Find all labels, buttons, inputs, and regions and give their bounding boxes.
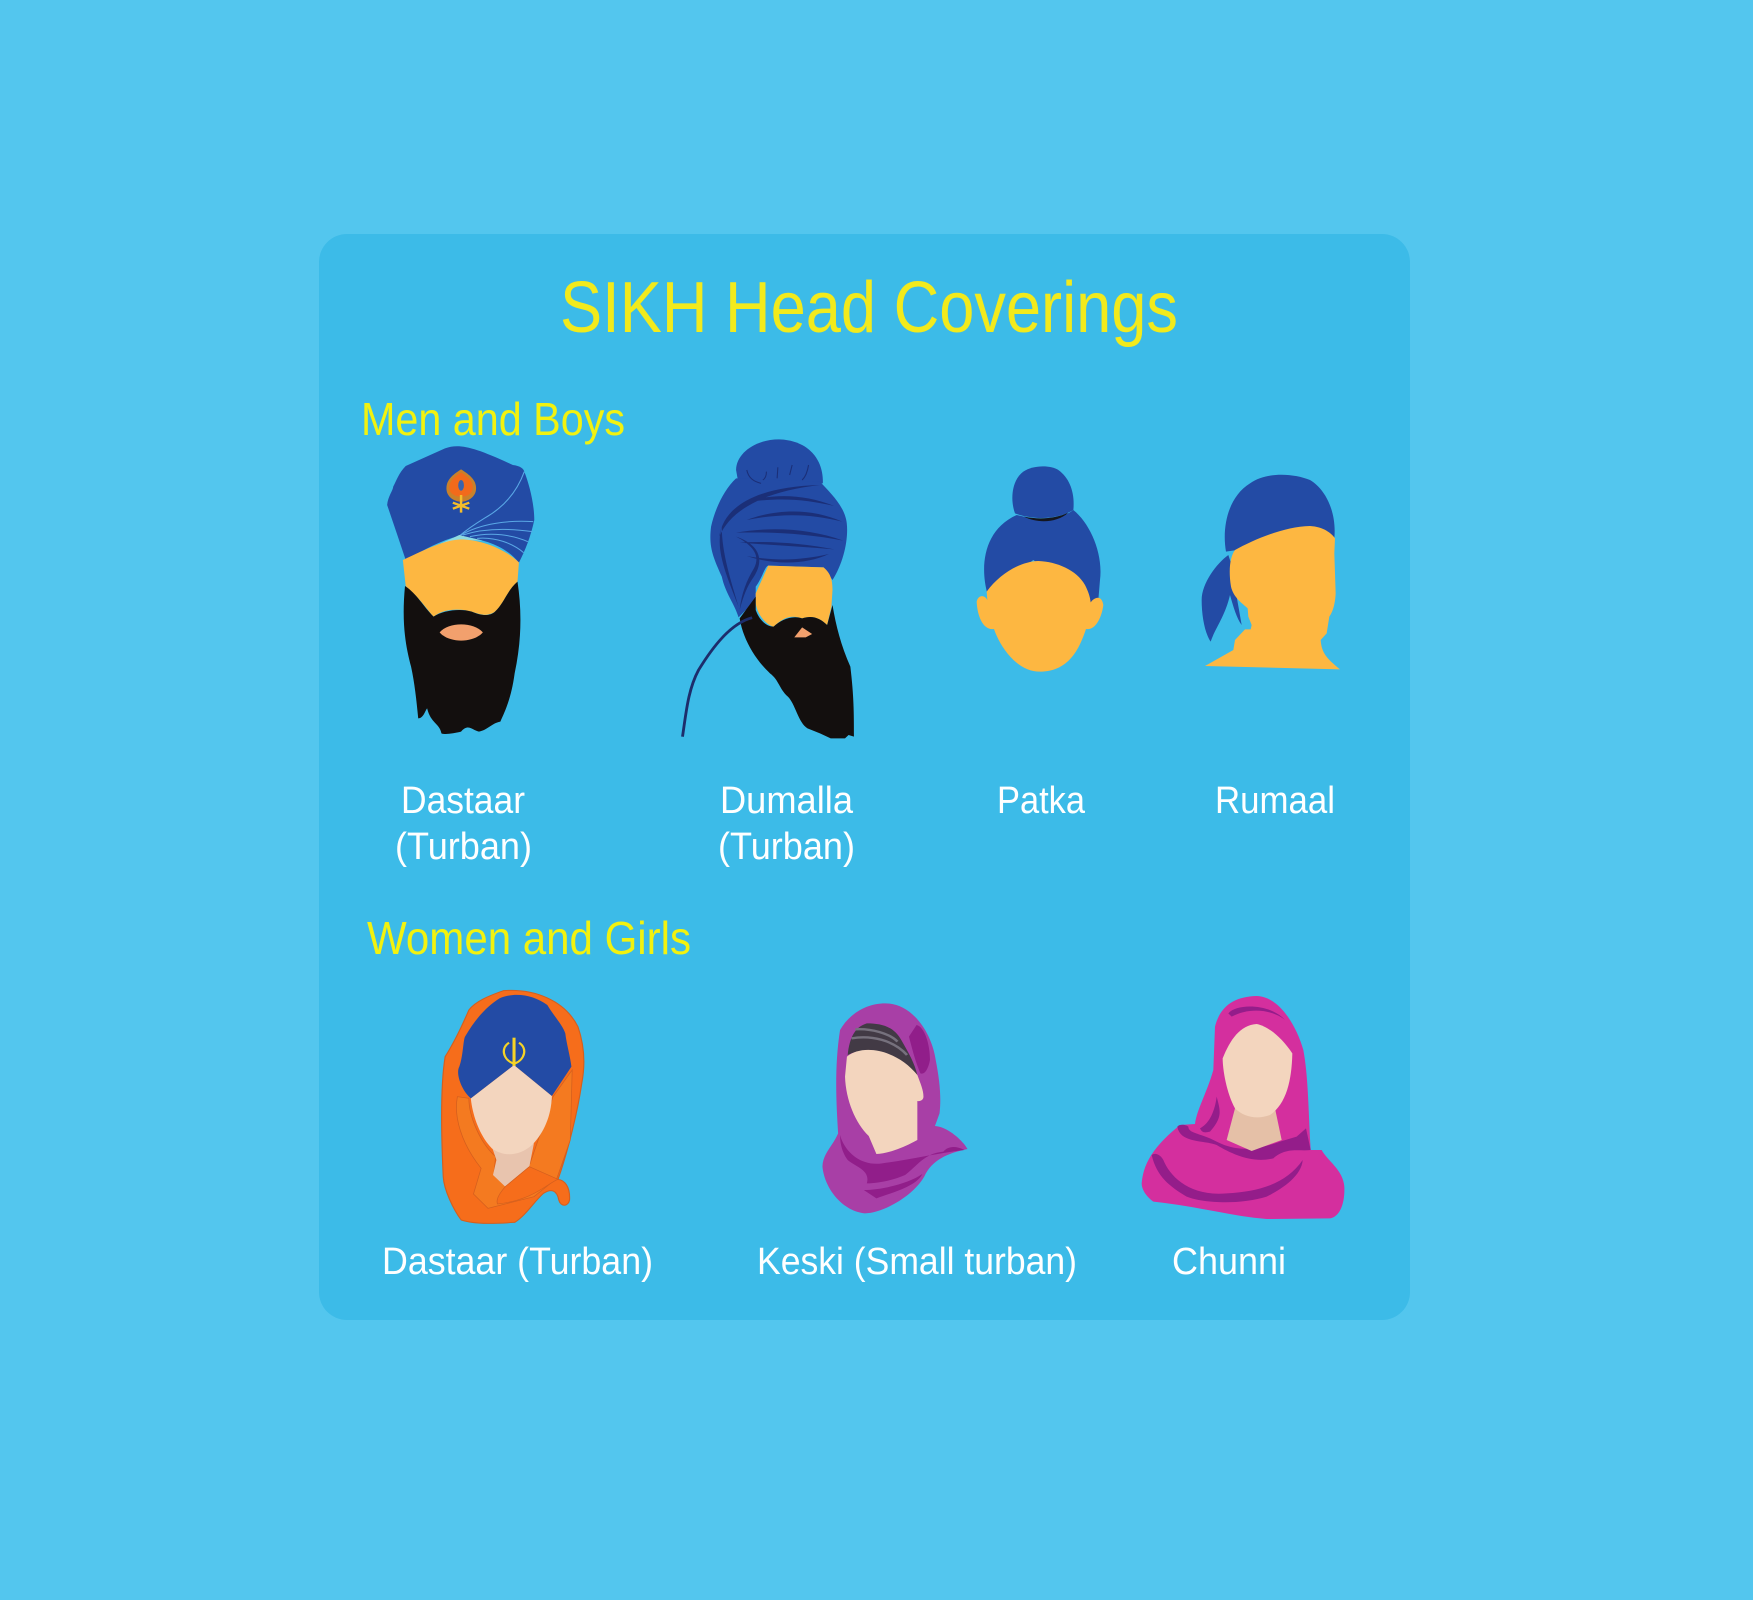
title: SIKH Head Coverings bbox=[560, 268, 1178, 348]
label: chunni: Chunni bbox=[1172, 1241, 1286, 1283]
cap bbox=[984, 510, 1101, 603]
label: patka: Patka bbox=[997, 780, 1086, 822]
strap bbox=[682, 618, 752, 737]
head and neck bbox=[1205, 526, 1340, 669]
scarf fold over neck bbox=[497, 1167, 558, 1204]
icon: chunni bbox=[1142, 996, 1344, 1219]
shawl fold bbox=[1152, 1154, 1303, 1202]
bun bbox=[736, 439, 823, 483]
khanda emblem bbox=[504, 1038, 524, 1066]
hood folds bbox=[1200, 1007, 1285, 1132]
keski band bbox=[848, 1023, 917, 1075]
turban bbox=[387, 446, 534, 563]
icon: dumalla turban with beard bbox=[682, 439, 854, 738]
tied tail bbox=[1202, 555, 1242, 642]
face bbox=[756, 566, 832, 627]
band stripes bbox=[852, 1029, 907, 1055]
lighter scarf inner bbox=[456, 1070, 572, 1208]
neck bbox=[1227, 1108, 1282, 1151]
wrapped turban bbox=[710, 478, 847, 617]
purple scarf bbox=[822, 1003, 967, 1213]
magenta scarf bbox=[1142, 996, 1344, 1219]
orange scarf bbox=[442, 990, 584, 1223]
heading: women and girls: Women and Girls bbox=[367, 912, 691, 964]
face bbox=[845, 1050, 923, 1154]
top knot bbox=[1012, 466, 1074, 518]
face bbox=[1223, 1024, 1292, 1117]
label: dastaar: Dastaar bbox=[401, 780, 525, 822]
label: rumaal: Rumaal bbox=[1215, 780, 1335, 822]
beard bbox=[404, 582, 520, 734]
mouth bbox=[440, 624, 483, 641]
label: women's dastaar: Dastaar (Turban) bbox=[382, 1241, 653, 1283]
icon: keski with purple scarf bbox=[822, 1003, 967, 1213]
face bbox=[977, 561, 1103, 672]
turban fold lines bbox=[459, 472, 533, 553]
upper fold bbox=[909, 1025, 930, 1074]
blue turban bbox=[458, 995, 571, 1098]
khanda emblem bbox=[446, 469, 476, 513]
dark fold lines bbox=[719, 485, 843, 610]
heading: men and boys: Men and Boys bbox=[361, 393, 625, 445]
icon: dastaar turban with beard bbox=[387, 446, 534, 734]
face bbox=[403, 539, 519, 617]
icon: rumaal bbox=[1202, 475, 1340, 669]
label: keski: Keski (Small turban) bbox=[757, 1241, 1077, 1283]
icon: patka bbox=[977, 466, 1103, 672]
cloth cap bbox=[1225, 475, 1335, 552]
bun fold lines bbox=[747, 465, 809, 483]
neckline fold bbox=[1177, 1125, 1311, 1160]
face bbox=[471, 1065, 552, 1154]
beard bbox=[740, 597, 854, 738]
pale under-wrap bbox=[440, 535, 482, 544]
scarf dark folds bbox=[840, 1135, 964, 1183]
nose bbox=[794, 627, 812, 637]
lower fold bbox=[864, 1174, 922, 1198]
label: dumalla turban: (Turban) bbox=[718, 826, 855, 868]
neck bbox=[492, 1143, 534, 1187]
panel: main card bbox=[319, 234, 1410, 1320]
label: dumalla: Dumalla bbox=[720, 780, 854, 822]
icon: women's dastaar with orange scarf bbox=[442, 990, 584, 1223]
label: dastaar turban: (Turban) bbox=[395, 826, 532, 868]
dark band bbox=[1024, 513, 1068, 521]
